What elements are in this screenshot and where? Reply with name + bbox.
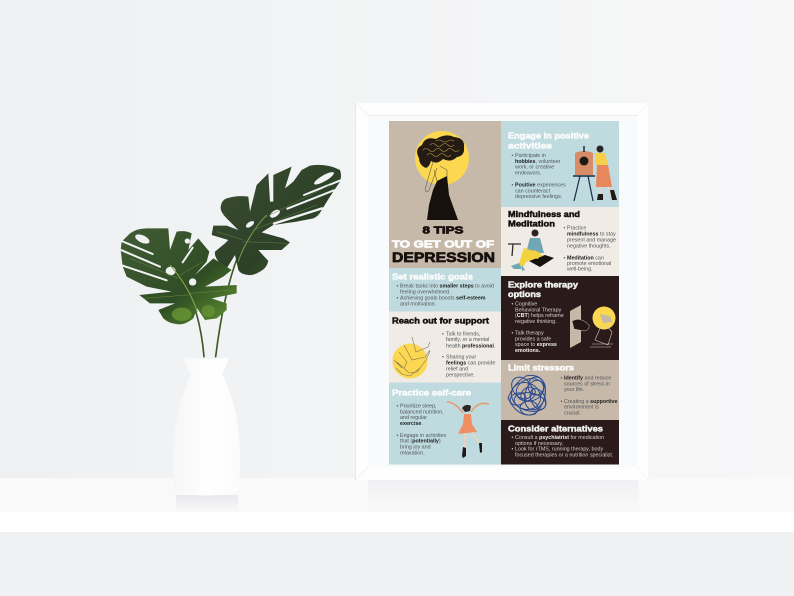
text block: Consult a psychiatrist for medication — [515, 435, 604, 441]
text block: • — [396, 284, 398, 290]
text block: (CBT) helps reframe — [515, 313, 564, 319]
text block: hobbies, volunteer — [515, 159, 560, 165]
heading: Reach out for support — [392, 316, 489, 326]
icon: meditating man — [508, 230, 554, 271]
text block: and regular — [400, 415, 427, 421]
text block: feeling overwhelmed. — [400, 290, 450, 296]
heading: to get out of: TO GET OUT OF — [392, 240, 494, 250]
text block: provides a safe — [515, 336, 551, 342]
panel: engage in positive activities — [501, 121, 619, 207]
text block: work, or creative — [514, 165, 554, 171]
text block: Creating a supportive — [564, 399, 617, 405]
heading: Practice self-care — [392, 388, 471, 398]
panel: set realistic goals — [389, 268, 501, 312]
text block: present and manage — [567, 237, 616, 243]
left leaf — [119, 228, 237, 324]
text block: Prioritize sleep, — [400, 404, 437, 410]
text block: relaxation. — [400, 450, 425, 456]
text block: Practice — [567, 226, 586, 232]
text block: options if necessary. — [515, 441, 563, 447]
text block: • — [564, 255, 566, 261]
text block: Participate in — [515, 153, 546, 159]
text block: that (potentially) — [400, 439, 441, 445]
text block: Achieving goals boosts self-esteem — [400, 295, 486, 301]
text block: sources of stress in — [564, 381, 610, 387]
text block: well-being. — [566, 267, 593, 273]
text block: emotions. — [515, 348, 541, 354]
icon: holding hands — [392, 337, 430, 378]
text block: Behavioral Therapy — [515, 307, 562, 313]
panel: limit stressors — [501, 360, 619, 420]
text block: bring joy and — [400, 444, 431, 450]
text block: • — [512, 435, 514, 441]
text block: mindfulness to stay — [567, 232, 616, 238]
text block: • — [560, 399, 562, 405]
text block: Cognitive — [515, 301, 537, 307]
icon: dancing woman — [447, 402, 489, 458]
text block: family, or a mental — [446, 337, 489, 343]
text block: Break tasks into smaller steps to avoid — [400, 284, 494, 290]
heading: Meditation — [508, 218, 555, 228]
icon: painter at easel — [573, 146, 617, 201]
text block: promote emotional — [567, 261, 611, 267]
heading: Explore therapy — [508, 280, 578, 290]
text block: focused therapies or a nutrition specialist. — [515, 452, 613, 458]
text block: exercise. — [400, 421, 423, 427]
stems — [182, 255, 238, 357]
heading: Consider alternatives — [508, 424, 603, 434]
white vase — [173, 357, 240, 496]
text block: • — [512, 447, 514, 453]
text block: Engage in activities — [400, 433, 446, 439]
heading: Engage in positive — [508, 130, 589, 140]
panel: title — [389, 121, 501, 268]
text block: • — [396, 404, 398, 410]
text block: Talk therapy — [515, 330, 544, 336]
icon: tangled scribble — [507, 373, 549, 415]
text block: • — [512, 301, 514, 307]
heading: Limit stressors — [508, 362, 574, 372]
heading: 8 tips: 8 TIPS — [422, 224, 464, 236]
white shelf — [0, 478, 794, 596]
icon: woman with yellow sun — [415, 131, 469, 220]
heading: options — [508, 289, 541, 299]
text block: balanced nutrition, — [400, 409, 444, 415]
text block: • — [442, 331, 444, 337]
text block: relief and — [446, 366, 468, 372]
text block: depressive feelings. — [515, 194, 562, 200]
text block: space to express — [515, 342, 557, 348]
text block: Sharing your — [446, 355, 477, 361]
text block: Identify and reduce — [564, 375, 611, 381]
text block: negative thoughts. — [567, 243, 611, 249]
text block: Talk to friends, — [446, 331, 480, 337]
panel: practice self-care — [389, 382, 501, 464]
text block: negative thinking. — [515, 319, 557, 325]
heading: Mindfulness and — [508, 209, 580, 219]
heading: activities — [508, 140, 552, 150]
heading: Set realistic goals — [392, 272, 473, 282]
panel: mindfulness and meditation — [501, 207, 619, 276]
text block: • — [396, 295, 398, 301]
text block: • — [560, 375, 562, 381]
picture frame — [355, 103, 648, 480]
text block: endeavors. — [515, 171, 541, 177]
text block: feelings can provide — [446, 361, 495, 367]
text block: Look for rTMS, running therapy, body — [515, 447, 603, 453]
text block: health professional. — [446, 344, 495, 350]
text block: your life. — [564, 387, 584, 393]
right leaf — [212, 165, 341, 275]
text block: environment is — [564, 405, 599, 411]
icon: therapy illustration — [570, 305, 616, 348]
text block: and motivation. — [400, 301, 436, 307]
monstera plant — [119, 165, 341, 357]
text block: crucial. — [564, 410, 581, 416]
text block: Meditation can — [567, 255, 604, 261]
text block: • — [442, 355, 444, 361]
text block: can counteract — [515, 188, 551, 194]
text block: perspective. — [446, 372, 475, 378]
heading: depression: DEPRESSION — [392, 249, 495, 265]
text block: • — [512, 330, 514, 336]
poster — [389, 121, 619, 464]
text block: • — [512, 153, 514, 159]
panel: consider alternatives — [501, 420, 619, 464]
text block: • — [396, 433, 398, 439]
panel: explore therapy options — [501, 276, 619, 360]
text block: • — [512, 182, 514, 188]
text block: • — [564, 226, 566, 232]
text block: Positive experiences — [515, 182, 566, 188]
panel: reach out for support — [389, 312, 501, 382]
